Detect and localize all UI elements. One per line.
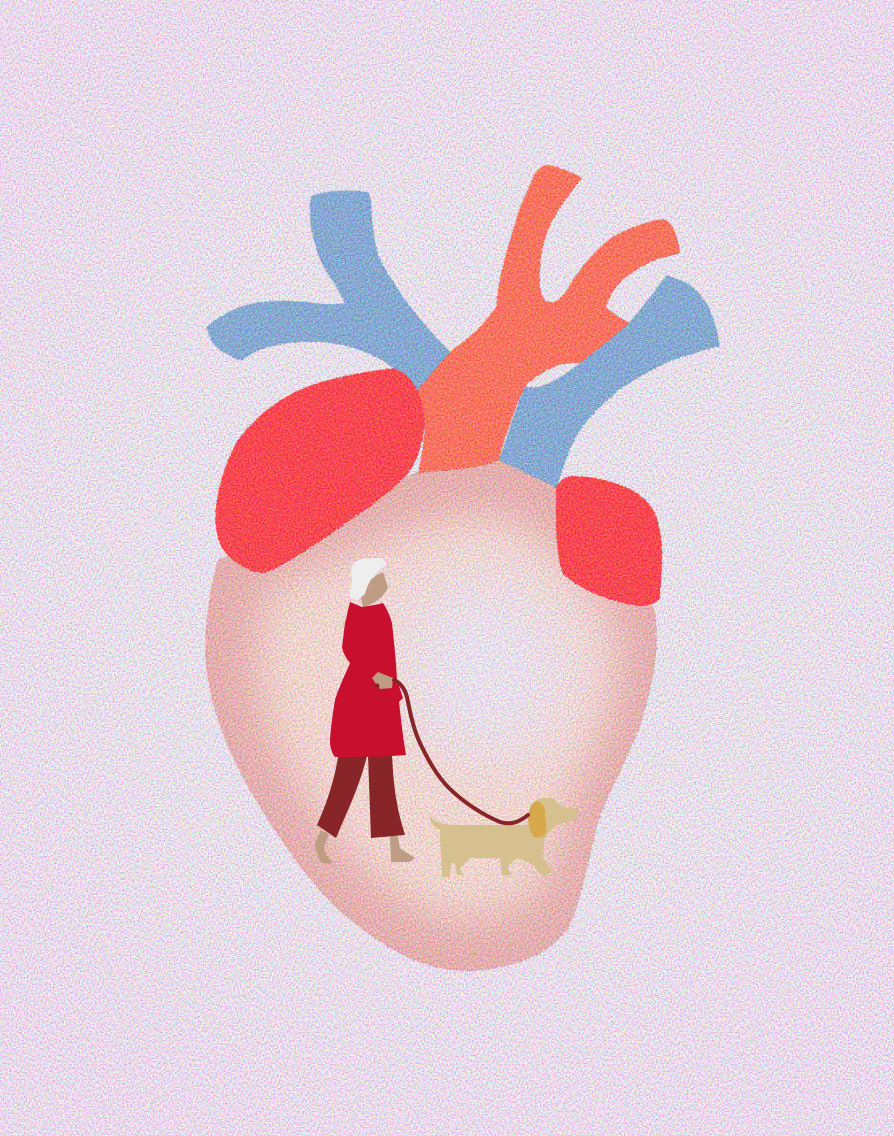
left atrium: red chamber [215,368,425,573]
hand [372,672,393,689]
wrist strap [374,684,380,688]
right atrium: red chamber [556,476,662,606]
dog ear [528,801,546,838]
trousers: front leg [368,755,405,838]
aorta: orange vessel [418,165,680,473]
person walking [315,558,415,863]
artery: right blue vessel [499,275,720,488]
vein: left blue vessel [206,190,451,400]
trousers: back leg [317,756,367,838]
leash [394,680,528,823]
heart body [204,460,658,972]
left foot [315,830,333,863]
neck and face [361,572,388,608]
red coat [330,602,406,757]
white hair [349,558,387,600]
dog body [429,798,578,877]
right foot [390,836,415,862]
dog [429,798,578,877]
